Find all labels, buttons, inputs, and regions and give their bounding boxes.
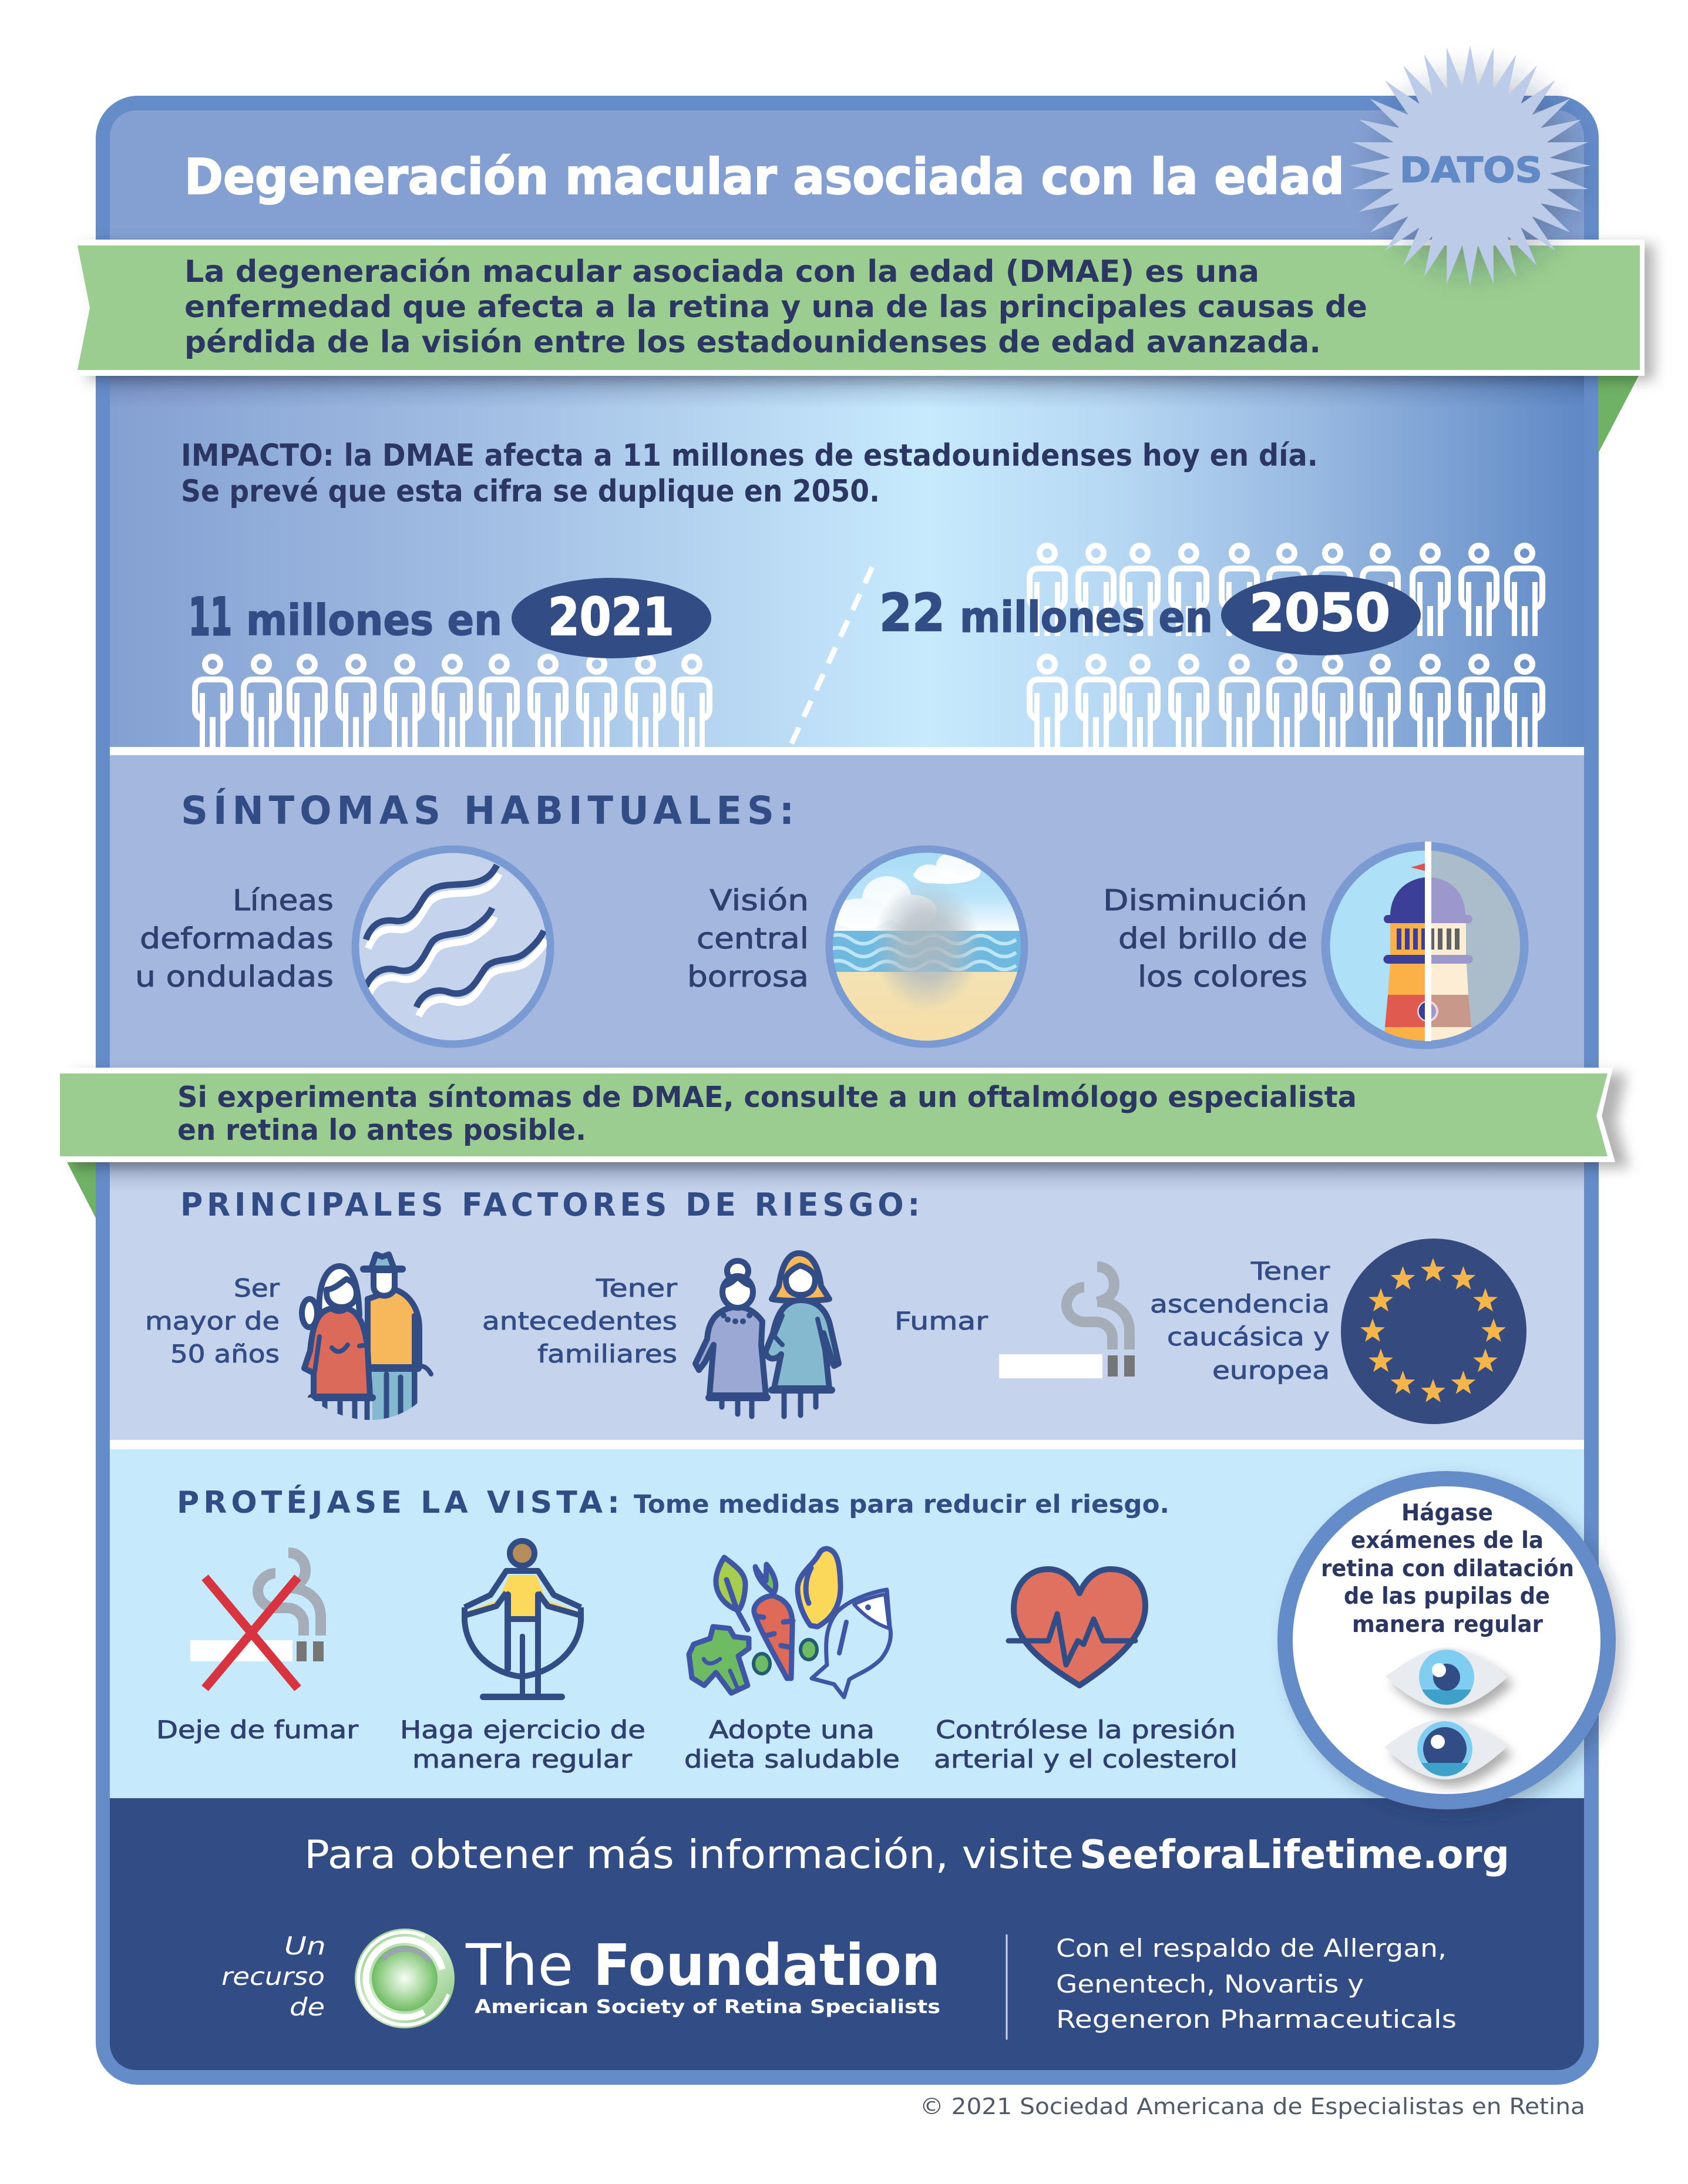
icon: jump rope: [465, 1541, 581, 1700]
icon: older couple: [302, 1254, 431, 1424]
divider under impact: [110, 747, 1584, 755]
label: blurred vision: borrosa: [687, 960, 809, 994]
label: blurred vision: central: [697, 922, 809, 955]
footer divider: [1006, 1934, 1008, 2040]
banner text: enfermedad que afecta a la retina y una de las principales causas de: [184, 290, 1367, 325]
heading: protect vision: Tome medidas para reducir el riesgo.: [634, 1490, 1169, 1519]
heading: protect vision: PROTÉJASE LA VISTA:: [177, 1485, 624, 1520]
panel: footer: [110, 1798, 1584, 2070]
label: dim colors: del brillo de: [1118, 922, 1307, 955]
label: diet: [684, 1715, 900, 1774]
heading: protect vision: [177, 1485, 1169, 1520]
banner text: pérdida de la visión entre los estadounidenses de edad avanzada.: [184, 325, 1321, 360]
banner text: Si experimenta síntomas de DMAE, consulte a un oftalmólogo especialista: [177, 1081, 1357, 1114]
logo: wordmark: The: [465, 1932, 573, 1998]
callout text: retina con dilatación: [1321, 1556, 1574, 1582]
logo: wordmark: Foundation: [593, 1932, 940, 1998]
label: family history: antecedentes: [482, 1307, 677, 1335]
people: 2021 row: [195, 657, 710, 747]
footer: website line: Para obtener más información, visite: [304, 1832, 1074, 1877]
footer: sponsors: Genentech, Novartis y: [1056, 1970, 1364, 1998]
callout: retina exam: [1285, 1479, 1608, 1802]
callout text: exámenes de la: [1351, 1527, 1544, 1554]
panel: protect: [110, 1449, 1584, 1798]
icon: wavy lines circle: [355, 849, 550, 1044]
label: ancestry: Tener: [1250, 1257, 1330, 1286]
label: diet: Adopte una: [709, 1715, 875, 1744]
label: ancestry: europea: [1212, 1356, 1330, 1385]
callout text: [1321, 1500, 1574, 1638]
icon: quit smoking: [190, 1553, 324, 1688]
label: blurred vision: Visión: [710, 884, 809, 917]
stat: 11 millones en 2021: [189, 578, 711, 658]
risk top shadow: [110, 1162, 1584, 1185]
icon: beach with central blur: [828, 846, 1028, 1051]
footer: resource of: de: [290, 1993, 325, 2021]
impact text: [181, 438, 1318, 509]
icon: heart with ECG: [1008, 1569, 1145, 1685]
impact text: Se prevé que esta cifra se duplique en 2050.: [181, 474, 880, 509]
label: wavy lines: u onduladas: [135, 960, 334, 994]
panel stack: [110, 110, 1584, 2070]
label: family history: [482, 1274, 678, 1368]
stat: 11 millones en 2021: 11: [189, 587, 232, 647]
stat: 22 millones en 2050: millones en: [960, 593, 1213, 642]
label: age: Ser: [234, 1274, 280, 1303]
heading: risk factors: PRINCIPALES FACTORES DE RIESGO:: [180, 1186, 924, 1223]
logo: wordmark: [465, 1932, 940, 2018]
icon: mother and daughter: [695, 1253, 839, 1416]
banner text: La degeneración macular asociada con la edad (DMAE) es una: [184, 254, 1259, 290]
footer: sponsors: Con el respaldo de Allergan,: [1056, 1934, 1447, 1963]
label: dim colors: Disminución: [1103, 884, 1307, 917]
banner: definition: [78, 240, 1645, 376]
label: exercise: Haga ejercicio de: [400, 1715, 645, 1744]
label: family history: familiares: [537, 1340, 677, 1368]
label: exercise: [400, 1715, 645, 1774]
callout text: de las pupilas de: [1344, 1583, 1550, 1610]
people: 2050 upper row: [1030, 546, 1542, 636]
label: age: 50 años: [170, 1340, 280, 1368]
label: age: [145, 1274, 280, 1368]
label: age: mayor de: [145, 1307, 280, 1335]
icon: eye top: [1386, 1648, 1508, 1708]
starburst: DATOS: [1350, 45, 1591, 286]
stat: 11 millones en 2021: millones en: [246, 595, 502, 645]
label: blood pressure: [934, 1715, 1238, 1774]
icon: eye bottom: [1384, 1719, 1507, 1779]
green fold: left of second banner: [66, 1160, 96, 1218]
logo: wordmark: American Society of Retina Specialists: [475, 1995, 940, 2018]
label: blurred vision: [687, 884, 809, 994]
stat: 22 millones en 2050: [879, 575, 1421, 655]
icon: healthy food: [689, 1549, 891, 1697]
label: dim colors: los colores: [1138, 960, 1307, 994]
banner text: en retina lo antes posible.: [177, 1113, 586, 1147]
label: quit smoking: Deje de fumar: [156, 1715, 359, 1744]
label: dim colors: [1103, 884, 1307, 994]
stat: 22 millones en 2050: 2050: [1249, 583, 1390, 643]
heading: symptoms: SÍNTOMAS HABITUALES:: [181, 788, 799, 833]
icon: cigarette: [999, 1267, 1135, 1378]
footer: sponsors: Regeneron Pharmaceuticals: [1056, 2005, 1457, 2034]
label: wavy lines: deformadas: [140, 922, 334, 955]
label: exercise: manera regular: [412, 1745, 633, 1774]
impact text: IMPACTO: la DMAE afecta a 11 millones de estadounidenses hoy en día.: [181, 438, 1318, 473]
footer: resource of: Un: [284, 1931, 326, 1960]
panel: title: [110, 110, 1584, 243]
footer: resource of: recurso: [221, 1962, 325, 1991]
footer: website line: SeeforaLifetime.org: [1080, 1832, 1509, 1877]
impact top shadow: [110, 376, 1584, 402]
panel: impact: [110, 373, 1584, 748]
label: family history: Tener: [596, 1274, 678, 1303]
label: blood pressure: arterial y el colesterol: [934, 1745, 1238, 1774]
label: wavy lines: Líneas: [233, 884, 334, 917]
callout text: Hágase: [1401, 1500, 1493, 1526]
label: ancestry: caucásica y: [1167, 1322, 1330, 1351]
footer: sponsors: [1056, 1934, 1457, 2034]
label: smoking: Fumar: [895, 1307, 988, 1335]
copyright: © 2021 Sociedad Americana de Especialistas en Retina: [920, 2094, 1585, 2119]
starburst: DATOS: DATOS: [1400, 150, 1542, 191]
label: ancestry: [1150, 1257, 1330, 1385]
banner: consult specialist: [60, 1068, 1615, 1162]
label: ancestry: ascendencia: [1150, 1290, 1330, 1318]
green fold: right of top banner: [1598, 373, 1640, 453]
footer: resource of: [221, 1931, 326, 2021]
icon: lighthouse half faded: [1326, 842, 1534, 1045]
divider under risk: [110, 1440, 1584, 1449]
stat: 11 millones en 2021: 2021: [548, 587, 674, 647]
logo: foundation ring: [345, 1919, 464, 2038]
label: blood pressure: Contrólese la presión: [936, 1715, 1236, 1744]
panel: symptoms: [110, 755, 1584, 1069]
panel: risk factors: [110, 1160, 1584, 1440]
label: diet: dieta saludable: [684, 1745, 900, 1774]
stat: 22 millones en 2050: 22: [879, 583, 945, 643]
title: Degeneración macular asociada con la edad: [184, 148, 1344, 206]
people: 2050 lower row: [1030, 657, 1542, 747]
banner text: [177, 1081, 1357, 1147]
callout text: manera regular: [1352, 1611, 1544, 1638]
dashed divider: [790, 567, 872, 747]
label: wavy lines: [135, 884, 334, 994]
banner text: [184, 254, 1367, 360]
icon: european stars circle: [1341, 1239, 1526, 1424]
